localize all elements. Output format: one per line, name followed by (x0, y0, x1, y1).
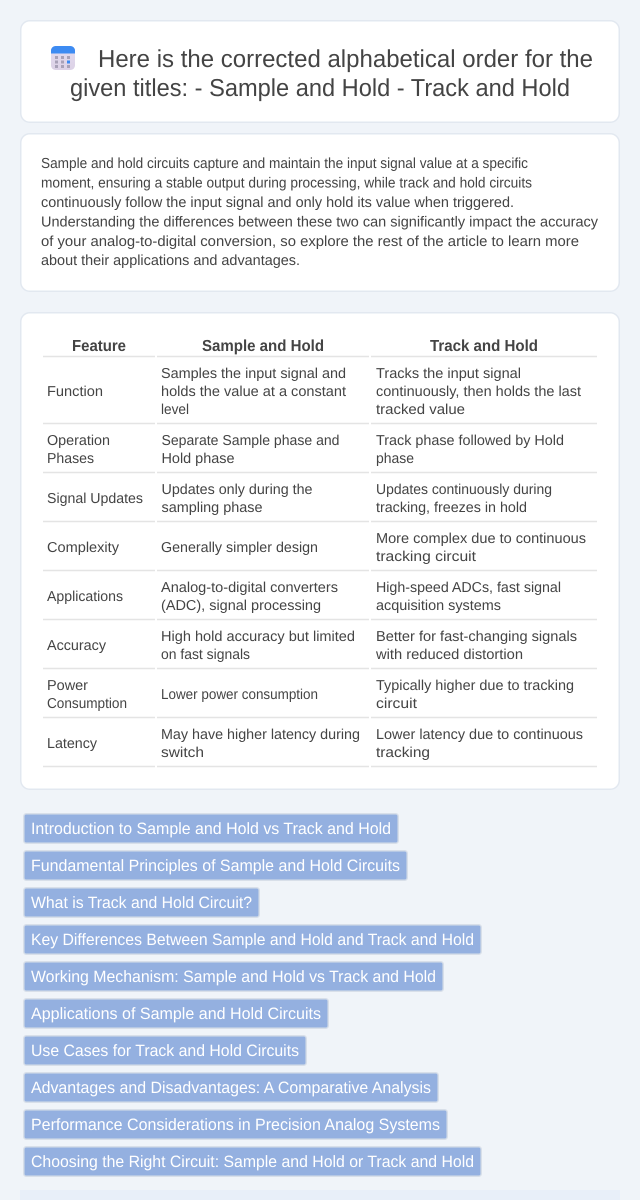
link: applications (24, 999, 328, 1028)
table row: Operation Phases: Track phase followed by Hold (376, 433, 564, 449)
table row: Latency: tracking (376, 745, 430, 761)
table row: Signal Updates: sampling phase (162, 500, 262, 516)
panel: bottom section edge (20, 1190, 620, 1200)
link: choosing the right circuit (24, 1147, 481, 1176)
link: advantages and disadvantages: Advantages and Disadvantages: A Comparative Analysis (31, 1079, 431, 1097)
panel: title card (21, 21, 619, 122)
panel: introduction (21, 134, 619, 291)
table row: Function: level (161, 402, 189, 418)
table header (72, 338, 538, 355)
table row: Power Consumption: Power (47, 678, 88, 694)
table row: Applications: (ADC), signal processing (161, 598, 321, 614)
link: fundamental principles: Fundamental Principles of Sample and Hold Circuits (31, 857, 400, 875)
table header: Track and Hold (430, 338, 538, 355)
table row: Complexity: Complexity (47, 540, 120, 556)
table row: Accuracy: with reduced distortion (375, 647, 523, 663)
title (70, 46, 593, 102)
table row: Applications: Applications (47, 589, 123, 605)
link: introduction (24, 814, 398, 843)
table row: Function (47, 366, 581, 418)
text block: introduction paragraph: moment, ensuring a stable output during processing, while track and hold circuits (41, 176, 532, 192)
link: performance considerations (24, 1110, 447, 1139)
table row: Operation Phases: Operation (47, 433, 110, 449)
table row: Function: Samples the input signal and (161, 366, 346, 382)
link: use cases (24, 1036, 306, 1065)
table row: Operation Phases: Separate Sample phase and (162, 433, 340, 449)
link: working mechanism: Working Mechanism: Sample and Hold vs Track and Hold (31, 968, 436, 986)
link: what is track and hold: What is Track and Hold Circuit? (31, 894, 252, 912)
table row: Function: Tracks the input signal (376, 366, 521, 382)
text block: introduction paragraph: of your analog-to-digital conversion, so explore the rest of the article to learn more (41, 234, 579, 250)
text block: introduction paragraph (41, 156, 599, 269)
table row: Applications (47, 580, 561, 614)
text block: introduction paragraph: Sample and hold circuits capture and maintain the input signal value at a specific (41, 156, 528, 172)
table row: Complexity (47, 531, 586, 565)
table of contents links (24, 814, 481, 1176)
link: what is track and hold (24, 888, 259, 917)
link: key differences: Key Differences Between Sample and Hold and Track and Hold (31, 931, 474, 949)
table row: Power Consumption (47, 678, 574, 712)
link: working mechanism (24, 962, 443, 991)
table row: Accuracy: High hold accuracy but limited (161, 629, 355, 645)
table row: Accuracy: Better for fast-changing signals (376, 629, 577, 645)
table row: Signal Updates: Updates only during the (162, 482, 312, 498)
table row: Function: continuously, then holds the last (376, 384, 581, 400)
table row: Latency: switch (161, 745, 204, 761)
link: choosing the right circuit: Choosing the Right Circuit: Sample and Hold or Track and Hold (31, 1153, 474, 1171)
table row: Latency: Lower latency due to continuous (376, 727, 583, 743)
table row: Accuracy: Accuracy (47, 638, 107, 654)
table row: Complexity: tracking circuit (376, 549, 476, 565)
table row: Signal Updates (47, 482, 552, 516)
panel: comparison table (21, 313, 619, 789)
table row: Latency: Latency (47, 736, 98, 752)
link: key differences (24, 925, 481, 954)
table row: Signal Updates: tracking, freezes in hold (376, 500, 527, 516)
icon: calendar (51, 46, 75, 70)
link: introduction: Introduction to Sample and Hold vs Track and Hold (31, 820, 391, 838)
table row: Applications: Analog-to-digital converters (161, 580, 338, 596)
table row: Applications: acquisition systems (376, 598, 501, 614)
table row: Power Consumption: Consumption (47, 696, 127, 712)
table row: Complexity: More complex due to continuous (376, 531, 586, 547)
text block: introduction paragraph: continuously follow the input signal and only hold its value when triggered. (41, 195, 514, 211)
table row: Accuracy (47, 629, 577, 663)
table row: Function: holds the value at a constant (161, 384, 346, 400)
table header: Feature (72, 338, 126, 355)
table header: Sample and Hold (202, 338, 324, 355)
table row: Signal Updates: Updates continuously during (376, 482, 552, 498)
table row: Latency: May have higher latency during (161, 727, 360, 743)
table row: Signal Updates: Signal Updates (47, 491, 143, 507)
link: advantages and disadvantages (24, 1073, 438, 1102)
table row: Accuracy: on fast signals (161, 647, 250, 663)
table row: Operation Phases: phase (376, 451, 414, 467)
text block: introduction paragraph: about their applications and advantages. (41, 253, 300, 269)
table row: Operation Phases: Hold phase (162, 451, 234, 467)
table row: Function: tracked value (376, 402, 465, 418)
title: given titles: - Sample and Hold - Track and Hold (70, 75, 570, 102)
table row: Operation Phases: Phases (47, 451, 94, 467)
link: performance considerations: Performance Considerations in Precision Analog Systems (31, 1116, 440, 1134)
table row: Latency (47, 727, 583, 761)
link: use cases: Use Cases for Track and Hold Circuits (31, 1042, 299, 1060)
table row: Power Consumption: Typically higher due to tracking (376, 678, 574, 694)
link: applications: Applications of Sample and Hold Circuits (31, 1005, 321, 1023)
table row: Power Consumption: circuit (376, 696, 417, 712)
link: fundamental principles (24, 851, 407, 880)
table row: Complexity: Generally simpler design (161, 540, 318, 556)
table row: Applications: High-speed ADCs, fast signal (376, 580, 561, 596)
title: Here is the corrected alphabetical order for the (98, 46, 593, 73)
table row: Operation Phases (47, 433, 564, 467)
table row: Power Consumption: Lower power consumption (161, 687, 318, 703)
table row: Function: Function (47, 384, 103, 400)
text block: introduction paragraph: Understanding the differences between these two can significantly impact the accuracy (41, 214, 599, 230)
